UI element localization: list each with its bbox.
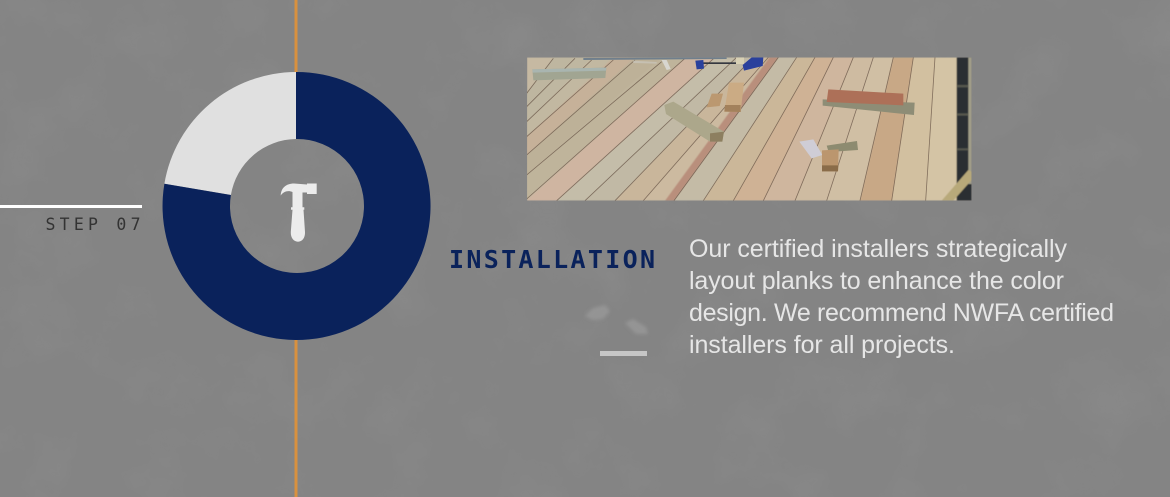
body description text	[689, 235, 1114, 359]
planks	[926, 57, 957, 201]
donut chart	[163, 72, 431, 340]
loose boards	[532, 57, 915, 171]
body description text: installers for all projects.	[689, 331, 955, 359]
body description text: layout planks to enhance the color	[689, 267, 1064, 295]
donut segment: navy progress	[163, 72, 431, 340]
section heading: INSTALLATION	[449, 245, 655, 274]
icon: hammer	[281, 184, 317, 242]
short grey accent rule	[600, 351, 647, 356]
step label: STEP 07	[46, 215, 140, 234]
donut segment: light remainder	[164, 72, 296, 195]
white rule beside step label	[0, 205, 142, 208]
vertical orange timeline line	[294, 0, 298, 497]
body description text: Our certified installers strategically	[689, 235, 1068, 263]
photo: deck planks under installation	[527, 57, 972, 201]
body description text: design. We recommend NWFA certified	[689, 299, 1114, 327]
plank seams	[527, 57, 935, 201]
gap and joists at right edge	[957, 57, 972, 201]
